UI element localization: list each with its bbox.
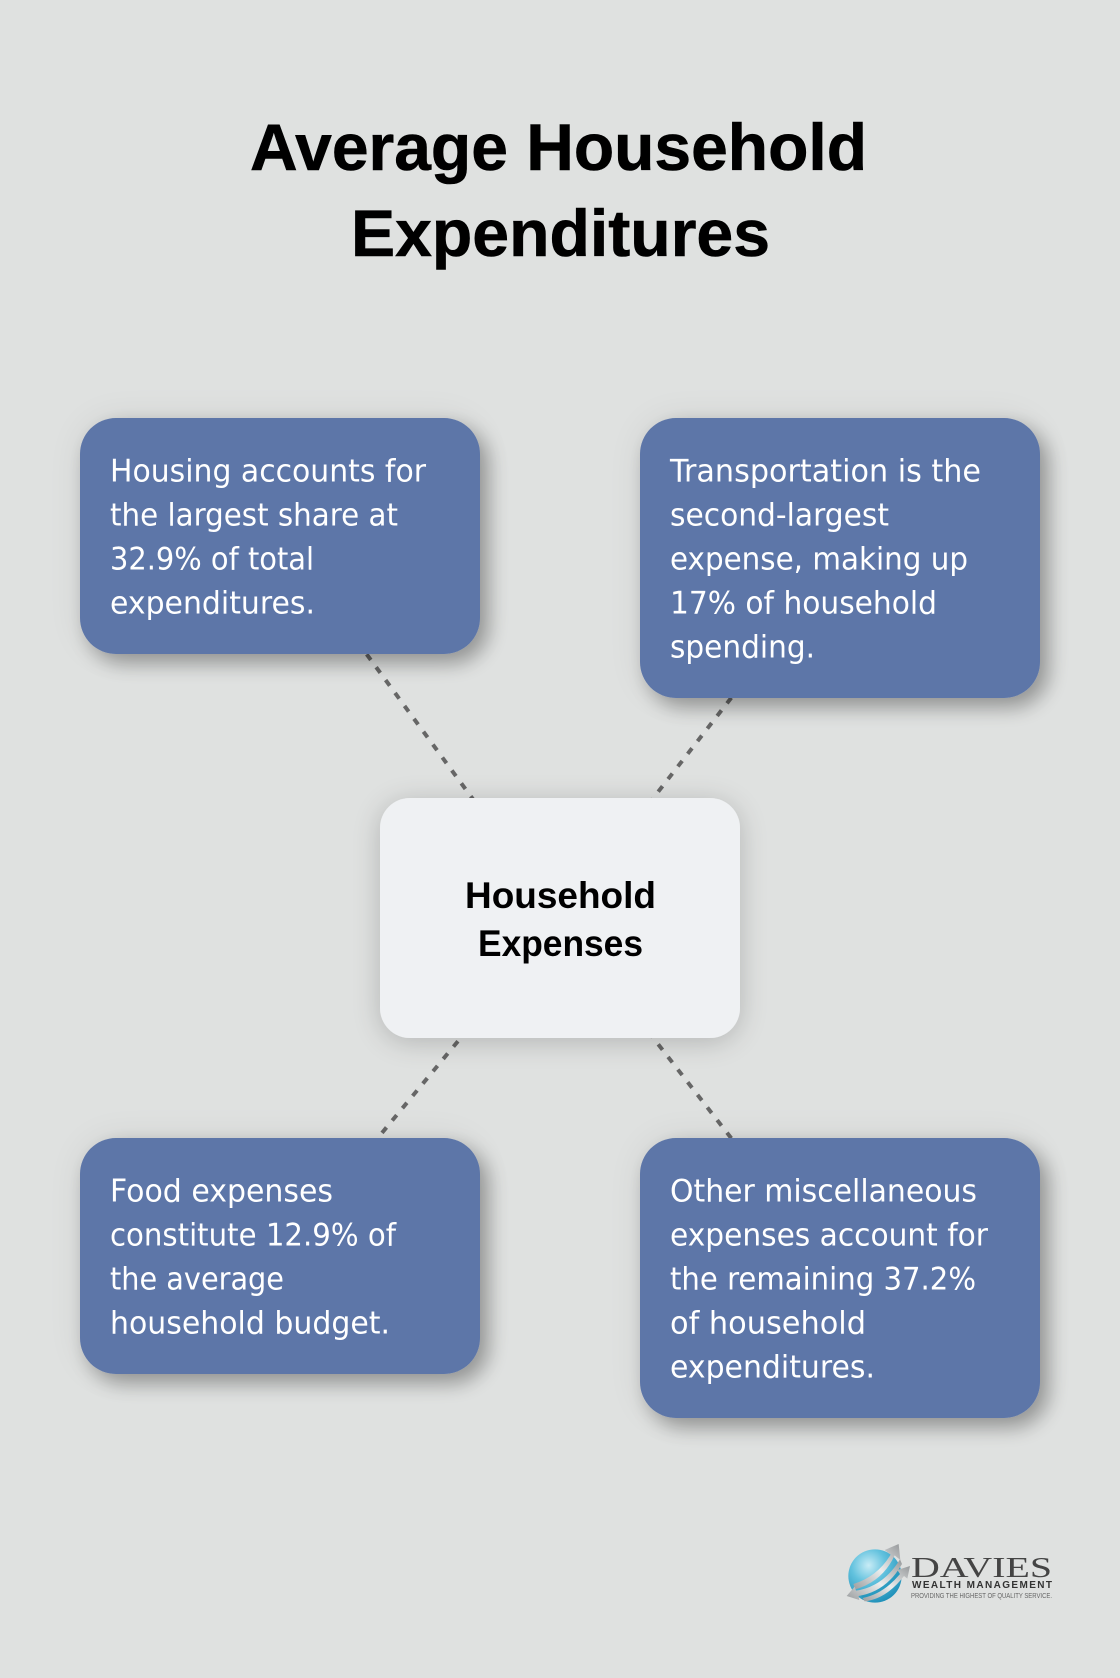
panel: transportation: Transportation is the xyxy=(669,454,981,490)
panel: center node: Household xyxy=(465,875,656,916)
dashed connector: transportation to center xyxy=(560,558,840,918)
logo: Davies Wealth Management: DAVIES xyxy=(911,1552,1052,1584)
panel: housing: 32.9% of total xyxy=(110,542,314,578)
dashed connector: housing to center xyxy=(280,536,560,918)
panel: transportation: expense, making up xyxy=(670,542,968,578)
panel: other: expenditures. xyxy=(670,1350,875,1386)
panel: food: Food expenses xyxy=(110,1174,333,1210)
panel: other: of household xyxy=(670,1306,866,1342)
panel: center node xyxy=(380,798,740,1038)
panel: housing: expenditures. xyxy=(110,586,315,622)
panel: food: constitute 12.9% of xyxy=(110,1218,397,1254)
panel: food: household budget. xyxy=(110,1306,390,1342)
dashed connector: food to center xyxy=(280,918,560,1256)
dashed connector: other to center xyxy=(560,918,840,1278)
panel: other xyxy=(640,1138,1040,1418)
panel: other: expenses account for xyxy=(670,1218,988,1254)
panel: transportation: spending. xyxy=(670,630,815,666)
panel: housing xyxy=(80,418,480,654)
panel: transportation: 17% of household xyxy=(670,586,937,622)
logo: Davies Wealth Management: PROVIDING THE HIGHEST OF QUALITY SERVICE. xyxy=(911,1593,1052,1600)
title: Expenditures xyxy=(351,196,770,270)
title: Average Household xyxy=(250,110,867,184)
panel: food xyxy=(80,1138,480,1374)
panel: housing: Housing accounts for xyxy=(110,454,426,490)
panel: housing: the largest share at xyxy=(110,498,398,534)
panel: other: the remaining 37.2% xyxy=(670,1262,976,1298)
title xyxy=(250,110,867,270)
logo: Davies Wealth Management xyxy=(847,1544,1052,1603)
panel: other: Other miscellaneous xyxy=(670,1174,977,1210)
panel: center node: Expenses xyxy=(478,923,643,964)
icon: globe with arrows xyxy=(847,1544,910,1603)
logo: Davies Wealth Management: WEALTH MANAGEMENT xyxy=(912,1580,1052,1591)
panel: transportation: second-largest xyxy=(670,498,889,534)
panel: transportation xyxy=(640,418,1040,698)
panel: food: the average xyxy=(110,1262,284,1298)
